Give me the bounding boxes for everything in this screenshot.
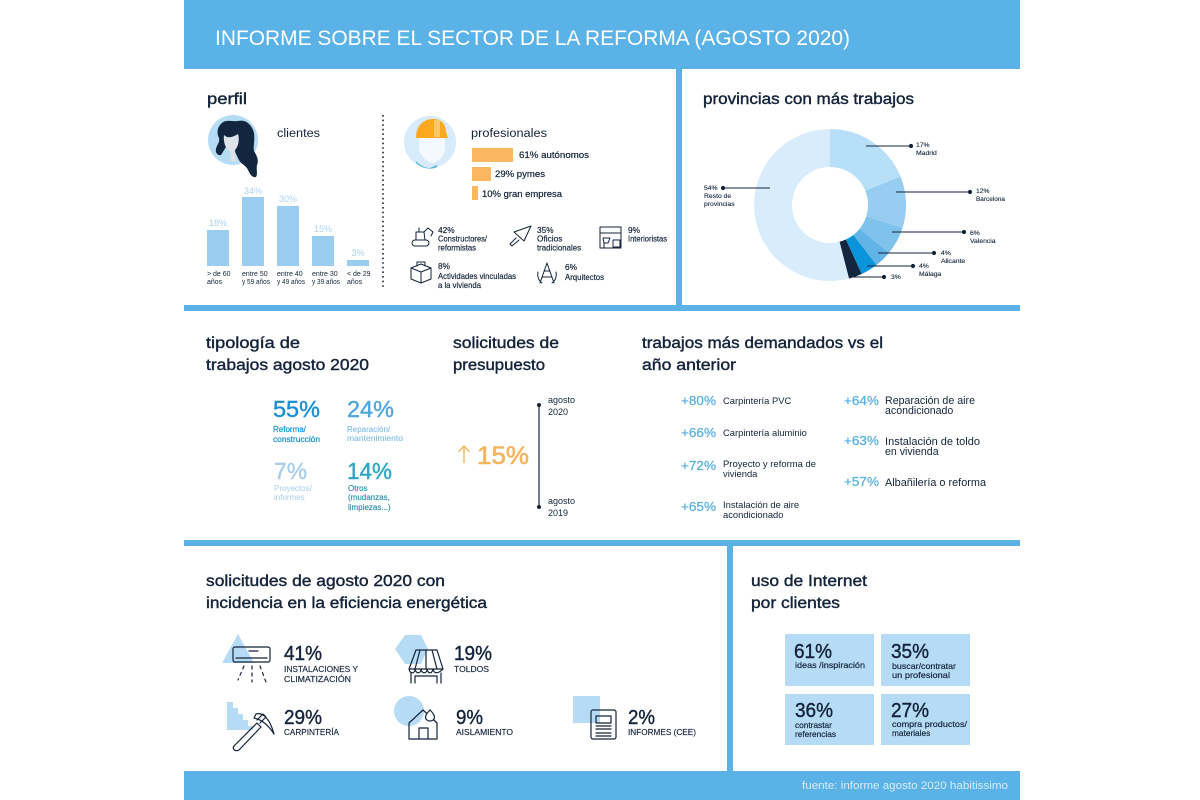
text: oficios xyxy=(537,225,581,252)
bar chart: professional types xyxy=(472,148,590,200)
donut callouts xyxy=(721,144,972,279)
card: 35%: buscar/contratar xyxy=(892,661,956,671)
icon: trowel xyxy=(510,226,531,246)
panel: tipología xyxy=(206,335,404,512)
icon: air conditioner xyxy=(222,634,270,682)
stat: 55%: Reforma/ xyxy=(273,425,307,434)
heading: eficiencia: solicitudes de agosto 2020 con xyxy=(206,573,445,590)
card: 61% xyxy=(785,634,874,686)
donut labels: 3% xyxy=(891,274,901,281)
label: clientes: clientes xyxy=(277,128,320,140)
panel: solicitudes de presupuesto xyxy=(453,335,575,518)
donut labels: provincias xyxy=(704,201,735,208)
bar chart: professional types: 61% autónomos xyxy=(519,150,590,160)
list: percentages: +65% xyxy=(681,499,716,514)
stat: 19%: 19% xyxy=(454,643,492,665)
source: fuente: informe agosto 2020 habitissimo xyxy=(802,780,1008,792)
text: actividades xyxy=(438,261,516,290)
list: job names: Proyecto y reforma de xyxy=(723,458,816,469)
card: 36% xyxy=(785,694,874,745)
list: percentages: +72% xyxy=(681,458,716,473)
text: interioristas xyxy=(628,225,667,244)
icon: hammer and stairs xyxy=(227,702,274,751)
stat: 41%: INSTALACIONES Y xyxy=(284,664,358,674)
stat: 24% xyxy=(347,396,404,443)
donut labels: 54% xyxy=(704,185,718,192)
heading: trabajos: trabajos más demandados vs el xyxy=(642,335,883,352)
donut labels: 4% xyxy=(919,263,929,270)
stat: 55%: 55% xyxy=(273,396,320,422)
bar chart: client ages: y 39 años xyxy=(312,279,340,286)
stat: 2%: 2% xyxy=(628,707,655,729)
bar chart: client ages: 18% xyxy=(209,218,227,228)
text: arquitectos: Arquitectos xyxy=(565,272,604,282)
heading: internet: uso de Internet xyxy=(751,573,868,590)
donut labels: Madrid xyxy=(916,150,937,157)
text: interioristas: Interioristas xyxy=(628,234,667,244)
list: percentages: +63% xyxy=(844,433,879,448)
stat: 24%: Reparación/ xyxy=(347,425,391,434)
donut labels: Barcelona xyxy=(976,196,1005,203)
bar chart: professional types: 29% pymes xyxy=(495,169,546,179)
bar chart: client ages: < de 29 xyxy=(347,271,371,278)
timeline: agosto xyxy=(548,395,575,405)
timeline: 2019 xyxy=(548,508,568,518)
heading: trabajos xyxy=(642,335,883,374)
donut labels: Málaga xyxy=(919,271,942,278)
bar chart: client ages: y 59 años xyxy=(242,279,270,286)
stat: 9%: AISLAMIENTO xyxy=(456,727,513,737)
heading: solicitudes xyxy=(453,335,559,374)
text: oficios: 35% xyxy=(537,225,554,235)
list: job names: Carpintería PVC xyxy=(723,395,791,406)
text: constructores xyxy=(438,225,488,252)
heading: provincias: provincias con más trabajos xyxy=(703,91,914,108)
bar chart: client ages: 3% xyxy=(351,248,365,258)
icon: house with drop xyxy=(394,696,437,739)
timeline xyxy=(537,395,575,518)
list: job names: Instalación de aire xyxy=(723,499,799,510)
card: 36%: 36% xyxy=(795,700,833,722)
stat: 14%: 14% xyxy=(347,458,392,484)
icon: excavator xyxy=(412,228,433,246)
stat: 55% xyxy=(273,396,320,444)
stat: 29%: CARPINTERÍA xyxy=(284,727,339,737)
stat: 29%: 29% xyxy=(284,707,322,729)
stat: 9%: 9% xyxy=(456,707,483,729)
panel: trabajos más demandados: Reparación de aire xyxy=(885,395,975,407)
text: actividades: 8% xyxy=(438,261,451,271)
text: constructores: reformistas xyxy=(438,242,476,252)
card: 35%: un profesional xyxy=(892,670,950,680)
bar chart: client ages: años xyxy=(207,279,223,286)
card: 36%: contrastar xyxy=(795,720,832,730)
bar chart: client ages: > de 60 xyxy=(207,271,231,278)
stat: 24%: 24% xyxy=(347,396,394,422)
card: 27%: compra productos/ xyxy=(892,719,968,729)
card: 61%: 61% xyxy=(794,641,832,663)
card: 61%: ideas /inspiración xyxy=(795,660,865,670)
list: percentages xyxy=(681,393,879,514)
donut labels: Alicante xyxy=(941,258,965,265)
heading: internet: por clientes xyxy=(751,595,840,612)
list: job names xyxy=(723,395,816,520)
icon: compass xyxy=(538,263,556,283)
heading: solicitudes: presupuesto xyxy=(453,357,545,374)
donut labels: 17% xyxy=(916,142,930,149)
bar chart: professional types: 10% gran empresa xyxy=(482,189,562,199)
label: profesionales: profesionales xyxy=(471,128,547,140)
panel: provincias xyxy=(703,91,1005,281)
heading: tipología xyxy=(206,335,369,374)
heading: solicitudes: solicitudes de xyxy=(453,335,559,352)
donut labels: 4% xyxy=(941,250,951,257)
list: job names: acondicionado xyxy=(723,509,783,520)
heading: trabajos: año anterior xyxy=(642,357,736,374)
stat: 19%: TOLDOS xyxy=(454,664,489,674)
panel: eficiencia energética xyxy=(206,573,696,751)
text: arquitectos xyxy=(565,262,604,282)
card: 35% xyxy=(881,634,970,686)
bar chart: client ages: 30% xyxy=(279,194,297,204)
stat: 19% xyxy=(454,643,492,674)
heading: tipología: tipología de xyxy=(206,335,300,352)
list: percentages: +57% xyxy=(844,474,879,489)
panel: trabajos más demandados xyxy=(642,335,986,520)
stat: 9% xyxy=(456,707,513,737)
footer band xyxy=(184,771,1020,800)
bar chart: client ages: entre 40 xyxy=(277,271,303,278)
list: percentages: +64% xyxy=(844,393,879,408)
bar chart: client ages: entre 50 xyxy=(242,271,268,278)
stat: 41%: CLIMATIZACIÓN xyxy=(284,674,351,684)
stat: 7% xyxy=(274,458,313,502)
donut labels xyxy=(704,142,1005,281)
header band xyxy=(184,0,1020,69)
bar chart: client ages: 34% xyxy=(244,186,262,196)
icon: report xyxy=(573,696,616,739)
list: percentages: +66% xyxy=(681,425,716,440)
text: arquitectos: 6% xyxy=(565,262,578,272)
card: 27%: materiales xyxy=(892,728,930,738)
stat: 41%: 41% xyxy=(284,643,322,665)
stat: 7%: informes xyxy=(274,493,305,502)
panel: perfil xyxy=(207,91,667,290)
donut labels: Valencia xyxy=(970,238,996,245)
heading: tipología: trabajos agosto 2020 xyxy=(206,357,369,374)
card: 27%: 27% xyxy=(891,700,929,722)
list: job names: Carpintería aluminio xyxy=(723,427,807,438)
stat: 2%: INFORMES (CEE) xyxy=(628,727,696,737)
stat: 7%: 7% xyxy=(274,458,307,484)
bar chart: client ages: 15% xyxy=(314,224,332,234)
list: percentages: +80% xyxy=(681,393,716,408)
donut labels: 12% xyxy=(976,188,990,195)
text: oficios: Oficios xyxy=(537,234,562,244)
heading: perfil: perfil xyxy=(207,91,247,108)
text: constructores: Constructores/ xyxy=(438,234,488,244)
icon: box xyxy=(411,262,431,283)
panel: trabajos más demandados: acondicionado xyxy=(885,405,953,417)
stat: 2% xyxy=(628,707,696,737)
stat: 29% xyxy=(284,707,339,737)
panel: uso de Internet xyxy=(751,573,970,745)
panel: trabajos más demandados: Instalación de toldo xyxy=(885,436,980,448)
bar chart: client ages xyxy=(207,186,371,286)
heading: eficiencia xyxy=(206,573,487,612)
timeline: agosto xyxy=(548,496,575,506)
title: INFORME SOBRE EL SECTOR DE LA REFORMA (AGOSTO 2020) xyxy=(215,27,850,50)
icon: interior plan xyxy=(600,227,621,248)
stat: 14% xyxy=(347,458,392,512)
timeline: 2020 xyxy=(548,407,568,417)
panel: trabajos más demandados: en vivienda xyxy=(885,446,939,458)
bar chart: client ages: y 49 años xyxy=(277,279,305,286)
card: 36%: referencias xyxy=(795,729,836,739)
icon: client woman xyxy=(208,115,258,177)
stat: 24%: mantenimiento xyxy=(347,434,404,443)
heading: internet xyxy=(751,573,868,612)
heading: eficiencia: incidencia en la eficiencia energética xyxy=(206,595,487,612)
text: oficios: tradicionales xyxy=(537,242,581,252)
donut labels: 6% xyxy=(970,230,980,237)
text: actividades: a la vivienda xyxy=(438,280,481,290)
donut chart xyxy=(754,129,906,281)
stat: 7%: Proyectos/ xyxy=(274,484,313,493)
stat: up 15%: 15% xyxy=(477,442,529,470)
stat: 41% xyxy=(284,643,358,684)
bar chart: client ages: entre 30 xyxy=(312,271,338,278)
stat: 55%: construcción xyxy=(273,435,320,444)
card: 35%: 35% xyxy=(891,641,929,663)
list: job names: vivienda xyxy=(723,468,758,479)
card: 27% xyxy=(881,694,970,745)
icon: shop awning xyxy=(395,635,443,683)
icon: professional with helmet xyxy=(404,116,456,169)
bar chart: client ages: años xyxy=(347,279,363,286)
text: actividades: Actividades vinculadas xyxy=(438,271,516,281)
stat: 14%: (mudanzas, xyxy=(348,493,390,502)
stat: 14%: limpiezas...) xyxy=(348,503,391,512)
text: interioristas: 9% xyxy=(628,225,641,235)
stat: 14%: Otros xyxy=(348,484,368,493)
text: constructores: 42% xyxy=(438,225,455,235)
panel: trabajos más demandados: Albañilería o reforma xyxy=(885,477,986,489)
donut labels: Resto de xyxy=(704,193,731,200)
